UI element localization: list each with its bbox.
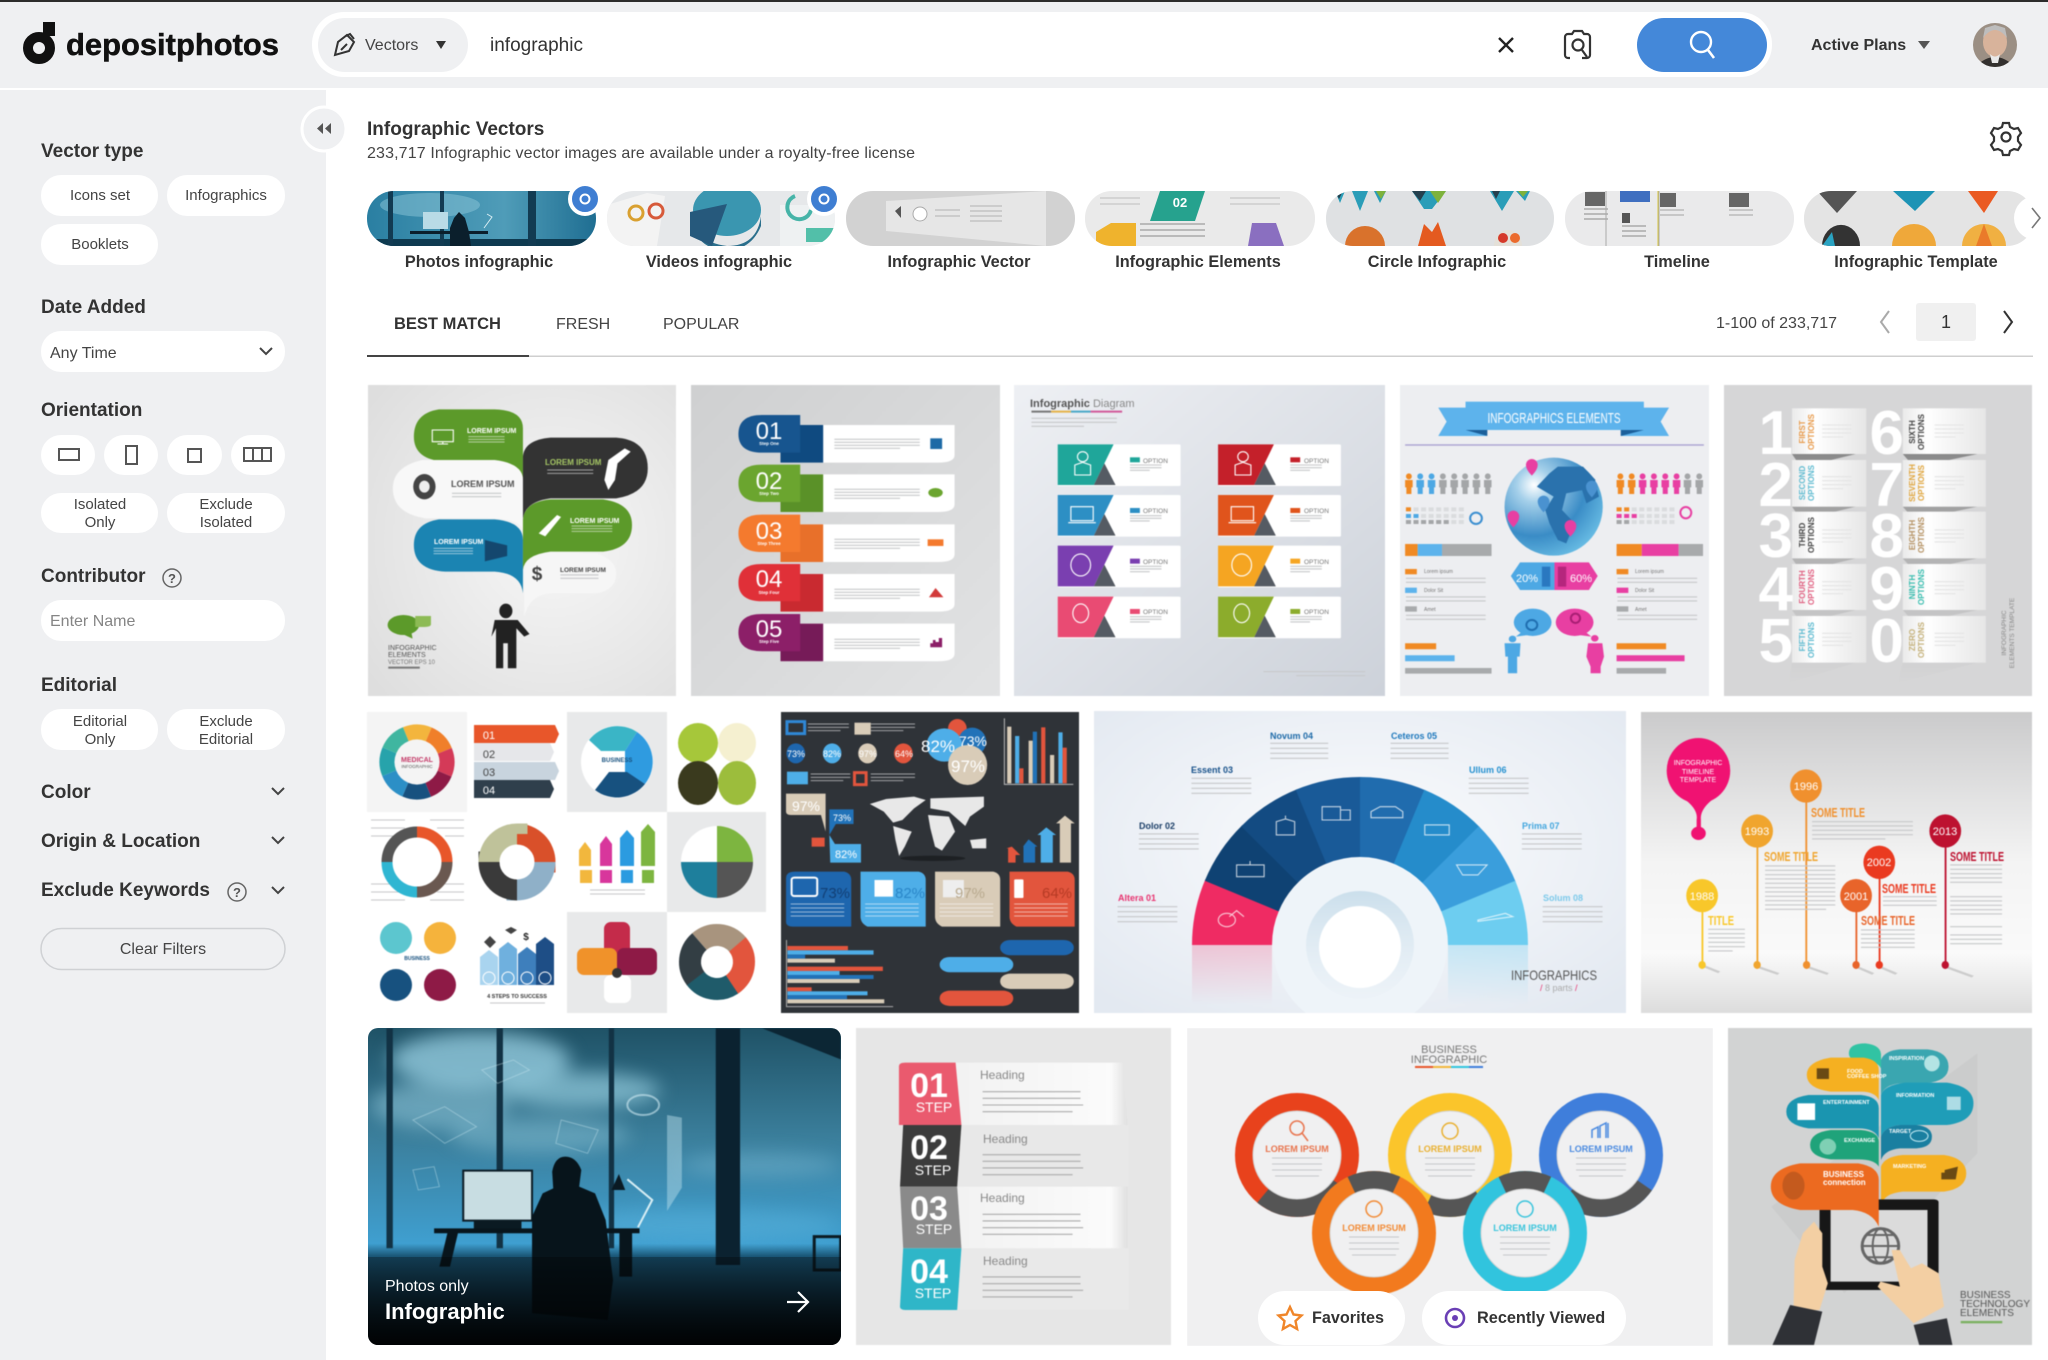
arrow — [787, 1292, 808, 1312]
category: videos infographic — [607, 184, 839, 271]
category: photos infographic: Photos infographic — [405, 253, 553, 271]
image tile: numbered steps ribbons: 04 — [756, 566, 782, 593]
image tile: speech bubble infographic: ELEMENTS — [388, 652, 426, 659]
category: infographic elements: 02 — [1173, 195, 1187, 210]
chart: arrow bars: 02 — [483, 749, 495, 761]
image tile: timeline template: SOME TITLE — [1861, 913, 1915, 928]
top header bar — [0, 0, 2048, 88]
image tile: dark statistics dashboard: 73% — [833, 813, 851, 823]
vectors dropdown: Vectors — [365, 37, 418, 54]
heading: contributor: Contributor — [41, 566, 146, 587]
image tile: infographic diagram option cards: OPTION — [1304, 559, 1329, 566]
image tile: speech bubble infographic: LOREM IPSUM — [467, 428, 517, 435]
quick button: recently viewed: Recently Viewed — [1477, 1309, 1605, 1327]
image tile: infographics elements globe: Amet — [1424, 607, 1436, 613]
image tile: numbered steps ribbons: 01 — [756, 418, 782, 445]
image tile: infographics elements globe: Dolor Sit — [1635, 588, 1655, 594]
promo card: photos only infographic — [368, 1028, 841, 1345]
image tile: dark statistics dashboard: 82% — [823, 749, 841, 759]
image tile: business technology tablet: ENTERTAINMENT — [1823, 1100, 1870, 1106]
chart: medical octagon — [378, 723, 456, 801]
image tile: timeline template: 1993 — [1745, 826, 1769, 838]
image tile: four step paper fold: Heading — [980, 1191, 1025, 1205]
image tile: dark statistics dashboard: 97% — [955, 885, 985, 902]
image tile: dark statistics dashboard: 82% — [895, 885, 925, 902]
heading: date added: Date Added — [41, 297, 146, 318]
search query: infographic — [490, 35, 583, 56]
icon: camera search — [1565, 31, 1590, 58]
image tile: infographics elements globe: Lorem ipsum — [1424, 569, 1453, 575]
image tile: infographic diagram option cards: OPTION — [1304, 609, 1329, 616]
active plans menu: Active Plans — [1811, 37, 1906, 54]
image tile: infographics elements globe: Amet — [1635, 607, 1647, 613]
image tile: numbers 1 to 0 options: OPTIONS — [1807, 516, 1816, 553]
image tile: four step paper fold: Heading — [983, 1132, 1028, 1146]
category: infographic template: Infographic Template — [1834, 253, 1998, 271]
image tile: numbers 1 to 0 options: 4 — [1759, 555, 1794, 624]
image tile: linked circles business infographic — [1187, 1028, 1713, 1346]
carousel next arrow — [2014, 196, 2048, 240]
filter row: origin and location — [41, 831, 284, 852]
image tile: dark statistics dashboard: 73% — [959, 733, 987, 749]
image tile: speech bubble infographic: $ — [532, 564, 543, 585]
image tile: numbers 1 to 0 options: SEVENTH — [1908, 464, 1917, 502]
image tile: timeline template: 2002 — [1867, 857, 1891, 869]
editorial pills: Editorial — [199, 731, 253, 748]
image tile: half circle transport infographic: Solum 08 — [1543, 893, 1583, 903]
image tile: numbers 1 to 0 options: 0 — [1870, 607, 1904, 676]
image tile: numbers 1 to 0 options: OPTIONS — [1807, 464, 1816, 501]
image tile: numbered steps ribbons: 02 — [756, 468, 782, 495]
image tile: infographic diagram option cards: OPTION — [1304, 458, 1329, 465]
ring: red — [1234, 1092, 1360, 1218]
image tile: business technology tablet: INFORMATION — [1896, 1093, 1934, 1099]
image tile: timeline template: TEMPLATE — [1680, 777, 1717, 784]
filter row: origin and location: Origin & Location — [41, 831, 200, 852]
image tile: infographic diagram option cards: OPTION — [1304, 508, 1329, 515]
button: clear filters — [41, 928, 285, 970]
image tile: speech bubble infographic: LOREM IPSUM — [451, 479, 515, 489]
image tile: linked circles business infographic: LOREM IPSUM — [1493, 1223, 1557, 1233]
editorial pills: Exclude — [199, 713, 253, 730]
badge: photo — [570, 184, 600, 214]
category: circle infographic: Circle Infographic — [1368, 253, 1506, 271]
heading: contributor: ? — [168, 571, 176, 586]
image tile: half circle transport infographic: Dolor 02 — [1139, 821, 1175, 831]
image tile: numbers 1 to 0 options: INFOGRAPHIC — [2001, 610, 2008, 656]
image tile: business technology tablet: MARKETING — [1893, 1164, 1926, 1170]
image tile: business technology tablet: BUSINESS — [1823, 1170, 1865, 1179]
inner circles — [1253, 1111, 1645, 1277]
filter pills: vector type — [41, 175, 285, 265]
image tile: numbers 1 to 0 options: 5 — [1759, 607, 1793, 676]
image tile: infographics elements globe: 20% — [1516, 573, 1538, 585]
promo title: Infographic — [385, 1299, 505, 1324]
image tile: four step paper fold: STEP — [916, 1099, 952, 1115]
button: clear filters: Clear Filters — [120, 941, 206, 958]
image tile: numbered steps ribbons: 03 — [756, 518, 782, 545]
image tile: business technology tablet: COFFEE SHOP — [1847, 1074, 1887, 1080]
image tile: four step paper fold: STEP — [916, 1221, 952, 1237]
image tile: half circle transport infographic: Essent 03 — [1191, 765, 1233, 775]
chart: business circle — [581, 726, 653, 798]
clouds — [370, 1032, 840, 1241]
filter pills: vector type: Booklets — [71, 236, 129, 253]
image tile: numbers 1 to 0 options: NINTH — [1908, 575, 1917, 599]
isolated pills — [41, 493, 285, 533]
image tile: 12 chart collage: MEDICAL — [401, 757, 434, 764]
image tile: numbers 1 to 0 options: THIRD — [1798, 523, 1807, 547]
image tile: speech bubble infographic: INFOGRAPHIC — [388, 645, 437, 652]
heading: orientation: Orientation — [41, 400, 142, 421]
image tile: infographic diagram option cards: OPTION — [1143, 559, 1168, 566]
image tile: half circle transport infographic — [1094, 710, 1626, 1014]
subheading: count: 233,717 Infographic vector images are available under a royalty-free license — [367, 145, 915, 162]
vectors dropdown — [318, 18, 468, 72]
image tile: numbered steps ribbons: Step Three — [757, 541, 781, 546]
chart: four circles: BUSINESS — [404, 956, 430, 962]
category: timeline — [1565, 191, 1794, 271]
image tile: speech bubble infographic: VECTOR EPS 10 — [388, 660, 436, 666]
image tile: numbers 1 to 0 options: SECOND — [1798, 466, 1807, 500]
filter row: exclude keywords: Exclude Keywords — [41, 880, 210, 901]
image tile: dark statistics dashboard: 97% — [792, 798, 820, 814]
input: enter name: Enter Name — [50, 613, 135, 630]
filter row: color: Color — [41, 782, 91, 803]
isolated pills: Exclude — [199, 496, 253, 513]
chart: four circles — [380, 922, 456, 1001]
image tile: business technology tablet: INSPIRATION — [1889, 1056, 1924, 1062]
image tile: dark statistics dashboard: 73% — [820, 885, 850, 902]
filter pills: vector type: Infographics — [185, 187, 267, 204]
collapse button — [302, 107, 346, 151]
image tile: numbers 1 to 0 options: ZERO — [1908, 629, 1917, 651]
image tile: infographics elements globe: INFOGRAPHICS ELEMENTS — [1488, 410, 1620, 427]
chart: four petals — [678, 723, 756, 805]
image tile: timeline template: 2013 — [1933, 826, 1957, 838]
image tile: numbers 1 to 0 options: ELEMENTS TEMPLATE — [2009, 597, 2016, 668]
pagination: 1 — [1941, 312, 1951, 332]
promo label: Photos only — [385, 1278, 469, 1295]
image tile: numbers 1 to 0 options: OPTIONS — [1807, 413, 1816, 450]
badge: video — [809, 184, 839, 214]
isolated pills: Only — [85, 514, 116, 531]
image tile: business technology tablet: EXCHANGE — [1844, 1138, 1876, 1144]
logo: depositphotos: depositphotos — [66, 27, 279, 62]
filter pills: vector type: Icons set — [70, 187, 131, 204]
chart: arrow bars: 03 — [483, 767, 495, 779]
image tile: half circle transport infographic: / 8 parts / — [1540, 983, 1578, 993]
image tile: timeline template — [1641, 712, 2032, 1013]
image tile: speech bubble infographic — [368, 385, 676, 696]
panel: filter sidebar — [0, 90, 346, 1360]
center circle — [1306, 858, 1414, 988]
image tile: numbered steps ribbons: Step Four — [758, 590, 780, 595]
image tile: numbers 1 to 0 options: OPTIONS — [1917, 464, 1926, 501]
image tile: numbers 1 to 0 options: 9 — [1870, 555, 1904, 624]
image tile: numbered steps ribbons: Step Five — [759, 639, 779, 644]
image tile: infographic diagram option cards: Infographic Diagram — [1030, 398, 1135, 410]
avatar — [1973, 23, 2017, 67]
select: any time: Any Time — [50, 345, 117, 362]
image tile: half circle transport infographic: INFOGRAPHICS — [1511, 967, 1597, 983]
image tile: numbers 1 to 0 options: OPTIONS — [1917, 568, 1926, 605]
quick button: favorites: Favorites — [1312, 1309, 1384, 1327]
reflection — [1192, 945, 1528, 1005]
chart: semicircle segments — [1191, 776, 1529, 946]
category strip — [367, 184, 2048, 271]
image tile: dark statistics dashboard: 64% — [895, 749, 913, 759]
image tile: half circle transport infographic: Altera 01 — [1118, 893, 1156, 903]
image tile: numbers 1 to 0 options: OPTIONS — [1917, 621, 1926, 658]
quick button: recently viewed — [1422, 1291, 1626, 1345]
filter row: exclude keywords: ? — [233, 885, 241, 900]
image tile: half circle transport infographic: Novum 04 — [1270, 731, 1313, 741]
image tile: four step paper fold — [856, 1028, 1171, 1345]
heading: editorial: Editorial — [41, 675, 117, 696]
image tile: timeline template: SOME TITLE — [1811, 805, 1865, 820]
image tile: business technology tablet: ELEMENTS — [1960, 1308, 2014, 1319]
image tile: four step paper fold: Heading — [983, 1254, 1028, 1268]
image tile: numbers 1 to 0 options: OPTIONS — [1807, 568, 1816, 605]
tabs: POPULAR — [663, 316, 739, 333]
image tile: linked circles business infographic: INFOGRAPHIC — [1411, 1054, 1487, 1066]
ring: cyan — [1462, 1170, 1588, 1291]
image tile: numbers 1 to 0 options: OPTIONS — [1807, 621, 1816, 658]
image tile: dark statistics dashboard: 82% — [921, 737, 955, 756]
image tile: speech bubble infographic: LOREM IPSUM — [434, 539, 484, 546]
image tile: dark statistics dashboard: 82% — [835, 849, 857, 861]
image tile: numbers 1 to 0 options: 3 — [1759, 502, 1793, 571]
image tile: infographic diagram option cards: OPTION — [1143, 458, 1168, 465]
pagination: 1-100 of 233,717 — [1716, 315, 1837, 332]
image tile: speech bubble infographic: LOREM IPSUM — [545, 458, 602, 467]
image tile: half circle transport infographic: Ullum 06 — [1469, 765, 1507, 775]
image tile: 12 chart collage: INFOGRAPHIC — [401, 764, 433, 769]
select: any time — [41, 331, 285, 372]
category: infographic elements — [1085, 191, 1315, 271]
isolated pills: Isolated — [74, 496, 126, 513]
icon: settings gear — [1991, 123, 2021, 155]
image tile: numbers 1 to 0 options: SIXTH — [1908, 420, 1917, 444]
image tile: numbers 1 to 0 options: 7 — [1870, 451, 1904, 520]
image tile: numbers 1 to 0 options: OPTIONS — [1917, 516, 1926, 553]
image tile: linked circles business infographic: LOREM IPSUM — [1342, 1223, 1406, 1233]
editorial pills — [41, 709, 285, 750]
image tile: linked circles business infographic: LOREM IPSUM — [1569, 1144, 1633, 1154]
image tile: infographics elements globe — [1400, 385, 1709, 696]
editorial pills: Only — [85, 731, 116, 748]
chart: swirl donut — [679, 924, 755, 1000]
image tile: infographics elements globe: Lorem ipsum — [1635, 569, 1664, 575]
image tile: numbered steps ribbons — [691, 385, 1000, 696]
image tile: infographics elements globe: 60% — [1570, 573, 1592, 585]
editorial pills: Editorial — [73, 713, 127, 730]
image tile: dark statistics dashboard: 97% — [859, 749, 877, 759]
image tile: numbers 1 to 0 options: 1 — [1759, 399, 1793, 468]
category: videos infographic: Videos infographic — [646, 253, 792, 271]
image tile: timeline template: TITLE — [1708, 913, 1734, 928]
image tile: numbered steps ribbons: Step Two — [759, 491, 779, 496]
image tile: numbered steps ribbons: 05 — [756, 616, 782, 643]
image tile: timeline template: SOME TITLE — [1950, 849, 2004, 864]
chart: arrow bars: 04 — [483, 785, 495, 797]
image tile: numbers 1 to 0 options: 2 — [1759, 451, 1793, 520]
filter row: exclude keywords — [41, 880, 284, 901]
tabs: FRESH — [556, 316, 610, 333]
image tile: timeline template: INFOGRAPHIC — [1674, 760, 1722, 767]
icon: clear — [1499, 38, 1513, 52]
chart: four steps: $ — [523, 932, 529, 943]
image tile: numbers 1 to 0 options: OPTIONS — [1917, 413, 1926, 450]
image tile: business technology tablet: BUSINESS — [1960, 1290, 2011, 1301]
image tile: half circle transport infographic: Prima 07 — [1522, 821, 1560, 831]
image tile: infographics elements globe: Dolor Sit — [1424, 588, 1444, 594]
image tile: dark statistics dashboard: 73% — [787, 749, 805, 759]
chart: business donut — [489, 834, 545, 890]
image tile: four step paper fold: STEP — [915, 1162, 951, 1178]
chart: arrow bars — [474, 725, 559, 798]
chart: business circle: BUSINESS — [602, 758, 632, 764]
image tile: 12 chart collage — [367, 712, 766, 1013]
input: enter name — [41, 600, 285, 641]
image tile: numbers 1 to 0 options — [1724, 385, 2032, 696]
image tile: speech bubble infographic: LOREM IPSUM — [570, 518, 620, 525]
category: infographic elements: Infographic Elements — [1115, 253, 1281, 271]
filter row: color — [41, 782, 284, 803]
image tile: four step paper fold: STEP — [915, 1285, 951, 1301]
category: infographic vector: Infographic Vector — [888, 253, 1031, 271]
image tile: speech bubble infographic: LOREM IPSUM — [560, 567, 606, 574]
chart: cross petals — [577, 922, 657, 1003]
image tile: linked circles business infographic: LOREM IPSUM — [1265, 1144, 1329, 1154]
image tile: infographic diagram option cards: OPTION — [1143, 508, 1168, 515]
heading: infographic vectors: Infographic Vectors — [367, 119, 544, 140]
chart: four steps: 4 STEPS TO SUCCESS — [487, 994, 547, 1000]
image tile: infographic diagram option cards — [1014, 385, 1385, 696]
chart: four steps — [480, 927, 554, 1003]
ring: yellow — [1387, 1092, 1513, 1218]
heading: vector type: Vector type — [41, 141, 143, 162]
image tile: numbers 1 to 0 options: FIRST — [1798, 420, 1807, 444]
image tile: half circle transport infographic: Ceteros 05 — [1391, 731, 1437, 741]
chart: quartered circle — [681, 826, 753, 898]
image tile: dark statistics dashboard: 97% — [951, 757, 985, 776]
quick button: favorites — [1258, 1291, 1405, 1345]
image tile: numbers 1 to 0 options: EIGHTH — [1908, 520, 1917, 550]
chart: option donut — [371, 820, 464, 900]
people row female — [1617, 473, 1703, 494]
category: timeline: Timeline — [1644, 253, 1710, 271]
ring: blue — [1538, 1092, 1664, 1218]
tabs: BEST MATCH — [394, 315, 501, 333]
image tile: timeline template: 1996 — [1794, 781, 1818, 793]
category: infographic vector — [846, 191, 1075, 271]
image tile: timeline template: SOME TITLE — [1764, 849, 1818, 864]
tabs — [367, 315, 2033, 357]
image tile: dark statistics dashboard — [781, 712, 1079, 1013]
image tile: linked circles business infographic: BUSINESS — [1421, 1044, 1477, 1056]
image tile: timeline template: SOME TITLE — [1882, 881, 1936, 896]
orientation buttons — [41, 435, 285, 475]
isolated pills: Isolated — [200, 514, 252, 531]
image tile: business technology tablet: connection — [1823, 1178, 1866, 1187]
search bar — [312, 12, 1772, 77]
category: photos infographic — [367, 191, 596, 271]
image tile: business technology tablet: TARGET — [1889, 1129, 1912, 1135]
image tile: numbers 1 to 0 options: FIFTH — [1798, 628, 1807, 651]
image tile: linked circles business infographic: LOREM IPSUM — [1418, 1144, 1482, 1154]
image tile: four step paper fold: 04 — [910, 1253, 948, 1291]
category: infographic template — [1804, 191, 2034, 271]
image tile: four step paper fold: 02 — [910, 1129, 948, 1167]
image tile: business technology tablet: TECHNOLOGY — [1960, 1299, 2030, 1310]
image tile: four step paper fold: 03 — [910, 1190, 948, 1228]
image tile: numbers 1 to 0 options: 8 — [1870, 502, 1904, 571]
pagination — [1716, 303, 2012, 341]
image tile: timeline template: 1988 — [1690, 891, 1714, 903]
people row male — [1405, 473, 1492, 494]
image tile: business technology tablet — [1728, 1028, 2032, 1345]
image tile: numbered steps ribbons: Step One — [759, 441, 779, 446]
image tile: timeline template: TIMELINE — [1682, 769, 1714, 776]
image tile: infographic diagram option cards: OPTION — [1143, 609, 1168, 616]
chart: growth arrows — [579, 824, 655, 894]
image tile: numbers 1 to 0 options: FOURTH — [1798, 570, 1807, 604]
image tile: four step paper fold: 01 — [910, 1067, 948, 1105]
search button — [1637, 18, 1767, 72]
image tile: timeline template: 2001 — [1844, 891, 1868, 903]
image tile: dark statistics dashboard: 64% — [1042, 885, 1072, 902]
chart: arrow bars: 01 — [483, 730, 495, 742]
image tile: four step paper fold: Heading — [980, 1068, 1025, 1082]
image tile: business technology tablet: FOOD — [1847, 1069, 1863, 1075]
ring: orange — [1311, 1170, 1437, 1294]
image tile: numbers 1 to 0 options: 6 — [1870, 399, 1904, 468]
category: circle infographic — [1326, 191, 1554, 271]
